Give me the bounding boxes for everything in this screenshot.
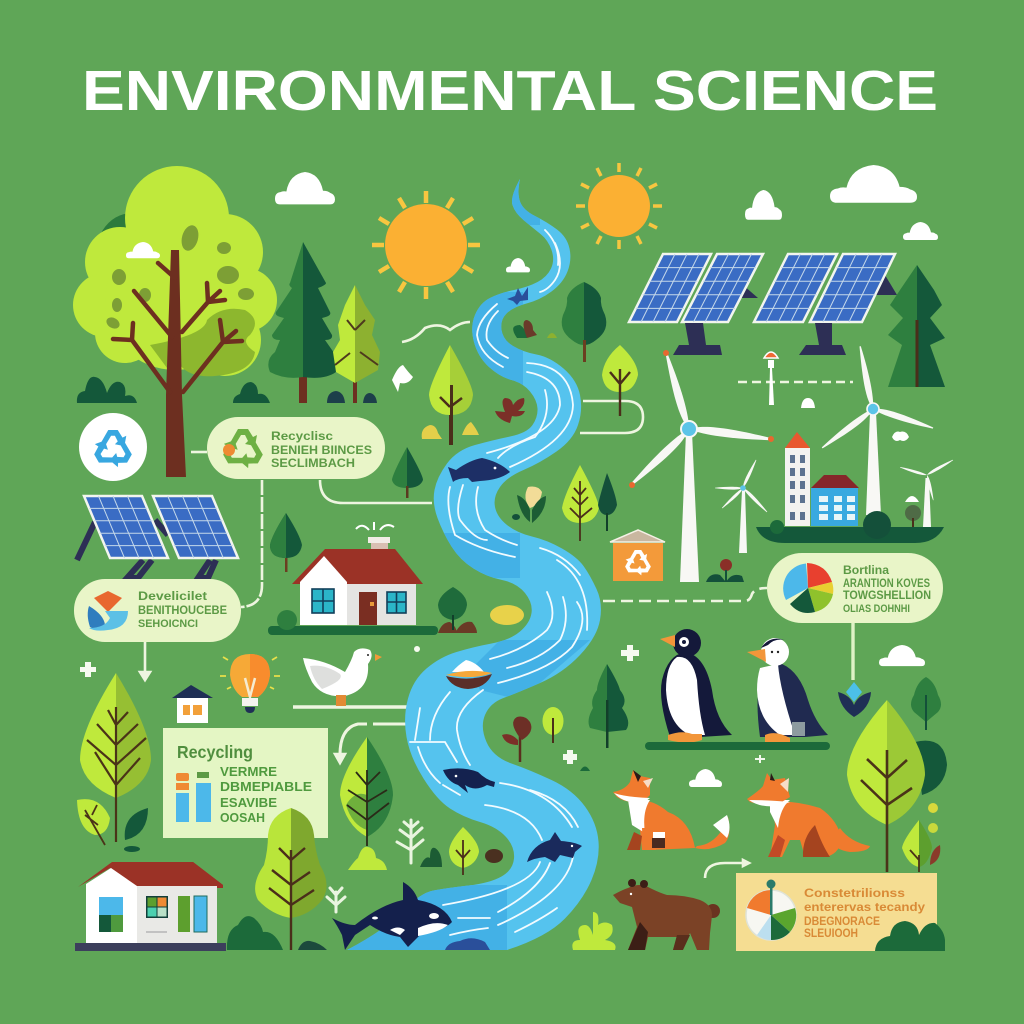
title: ENVIRONMENTAL SCIENCE bbox=[82, 59, 938, 123]
callout: develop pill bbox=[74, 579, 241, 642]
recycling bin bbox=[610, 530, 665, 581]
info box bottom right: SLEUIOOH bbox=[804, 928, 858, 940]
callout: recycle pill: Recyclisc bbox=[271, 429, 333, 443]
solar array top right bbox=[629, 254, 897, 355]
callout: pie chart pill: ARANTION KOVES bbox=[843, 578, 930, 590]
recycling info box bbox=[163, 728, 328, 838]
wind turbine medium bbox=[821, 346, 934, 515]
house center bbox=[268, 522, 477, 635]
callout: pie chart pill: Bortlina bbox=[843, 565, 890, 577]
pine tree bbox=[268, 242, 337, 403]
dark pine middle bbox=[580, 664, 628, 771]
bushes on box bbox=[875, 921, 945, 951]
icon: light bulb bbox=[220, 654, 280, 713]
info box bottom right: enterervas tecandy bbox=[804, 900, 925, 914]
white plants bbox=[327, 820, 423, 912]
recycling info box: Recycling bbox=[177, 742, 253, 762]
orca bbox=[332, 882, 452, 950]
penguin right bbox=[747, 638, 828, 743]
boat bbox=[446, 660, 492, 689]
sun left bbox=[372, 191, 480, 299]
plus signs bbox=[80, 645, 639, 764]
leaf tree near river bbox=[340, 737, 393, 870]
callout: pie chart pill bbox=[767, 553, 943, 623]
fish three bbox=[527, 832, 582, 862]
sun right bbox=[576, 163, 662, 249]
fish one bbox=[448, 458, 510, 482]
small plants near river bbox=[422, 320, 557, 625]
connector lines bbox=[140, 322, 853, 878]
callout: pie chart pill: OLIAS DOHNHI bbox=[843, 603, 910, 615]
recycling info box: VERMRE bbox=[220, 764, 277, 779]
blue rock in river bbox=[445, 938, 490, 950]
goose bbox=[303, 648, 382, 706]
small lime conifer bbox=[333, 285, 380, 403]
mini bar chart bbox=[176, 772, 211, 822]
trees along the river bbox=[392, 282, 638, 541]
icon: tulip marker bbox=[838, 682, 871, 717]
info box bottom right: DBEGNORACE bbox=[804, 916, 880, 928]
info box bottom right bbox=[736, 873, 945, 951]
recycling info box: OOSAH bbox=[220, 810, 265, 825]
big leaf tree right bbox=[847, 677, 947, 872]
gauge pie bbox=[746, 880, 796, 940]
fox left bbox=[613, 770, 730, 850]
penguin left bbox=[660, 629, 732, 742]
callout: develop pill: Develicilet bbox=[138, 591, 207, 603]
bear bbox=[613, 879, 720, 950]
house bottom left bbox=[75, 862, 226, 951]
green plant bottom bbox=[572, 912, 616, 950]
icon: recycling badge bbox=[79, 413, 147, 481]
wind turbine small bbox=[715, 459, 768, 553]
town buildings bbox=[756, 432, 944, 543]
river bbox=[340, 175, 601, 955]
recycling info box: ESAVIBE bbox=[220, 795, 277, 810]
callout: recycle pill: SECLIMBACH bbox=[271, 458, 355, 470]
callout: pie chart pill: TOWGSHELLION bbox=[843, 590, 931, 602]
info box bottom right: Constetrilionss bbox=[804, 886, 905, 900]
dark pine right bbox=[888, 265, 945, 387]
brown plant and lime tree bbox=[502, 707, 564, 762]
bushes under tree bbox=[77, 377, 377, 403]
sprite star bbox=[755, 755, 765, 763]
small dark tree by house bbox=[270, 513, 302, 572]
callout: recycle pill bbox=[207, 417, 385, 479]
solar panels left bbox=[77, 496, 238, 578]
bushes bottom bbox=[227, 916, 327, 950]
fox right bbox=[747, 773, 870, 857]
callout: recycle pill: BENIEH BIINCES bbox=[271, 445, 372, 457]
big tree bbox=[73, 166, 277, 477]
callout: develop pill: BENITHOUCEBE bbox=[138, 605, 227, 617]
leaf tree left bbox=[77, 673, 151, 852]
white bird bbox=[392, 365, 413, 392]
callout: develop pill: SEHOICNCI bbox=[138, 618, 198, 630]
wind turbine large left bbox=[628, 350, 774, 582]
dark plant and lime tree bbox=[420, 827, 503, 875]
river bird bbox=[507, 287, 528, 305]
wind turbine far right bbox=[900, 458, 954, 527]
small berry plant bbox=[706, 559, 744, 582]
clouds bbox=[275, 165, 938, 787]
small house bbox=[172, 685, 213, 723]
penguin ground bbox=[645, 742, 830, 750]
tree over box bbox=[255, 808, 327, 950]
recycling info box: DBMEPIABLE bbox=[220, 779, 312, 794]
fish two bbox=[443, 768, 495, 793]
mini tower and dome bbox=[764, 352, 815, 408]
pie chart bbox=[783, 563, 833, 613]
